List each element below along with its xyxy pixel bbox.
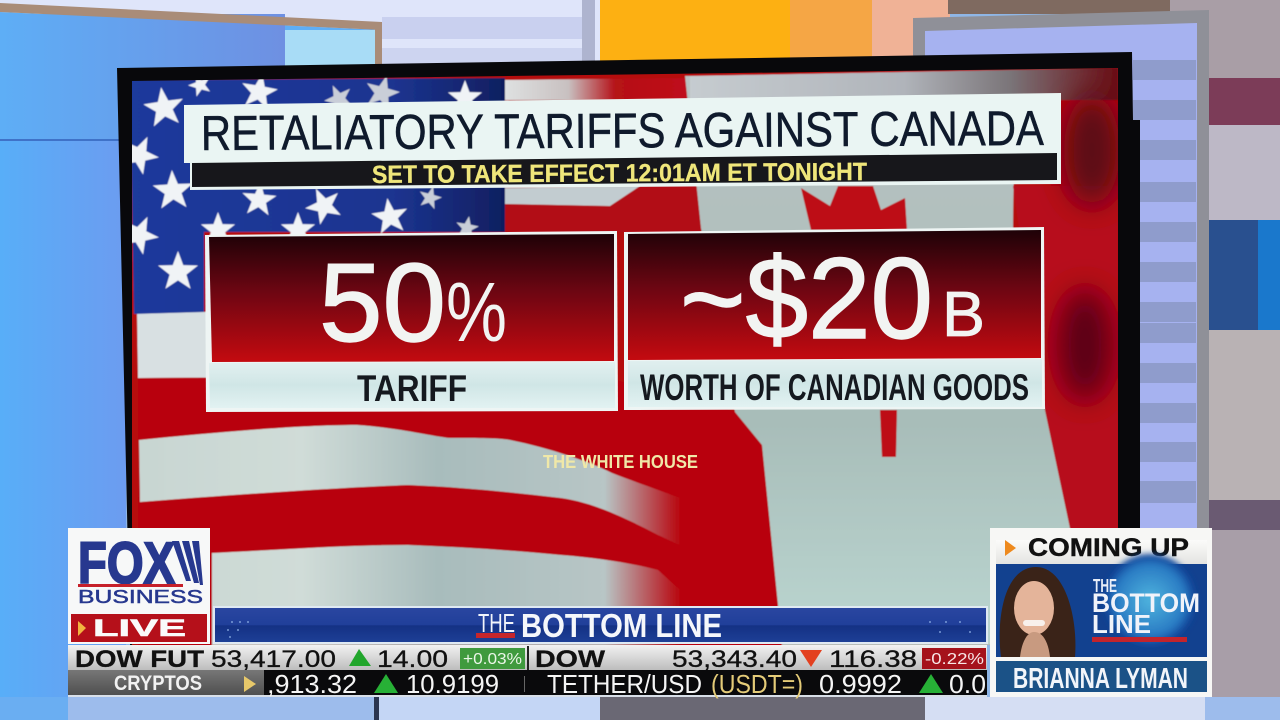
subtitle bar xyxy=(192,153,1057,189)
program title: the: THE xyxy=(478,608,515,638)
promo: bottom: BOTTOM xyxy=(1092,588,1200,618)
promo: line: LINE xyxy=(1092,609,1151,639)
coming up heading: COMING UP xyxy=(1028,534,1189,562)
logo wordmark: business: BUSINESS xyxy=(78,587,203,607)
title banner xyxy=(184,93,1061,190)
dow value: 53,343.40 xyxy=(672,646,797,673)
ticker: top row: +0.03% xyxy=(463,651,522,668)
fox business logo xyxy=(68,528,210,644)
logo wordmark: fox: FOX xyxy=(78,531,175,596)
logo searchlight marks xyxy=(172,541,203,585)
ticker: top row xyxy=(68,645,987,673)
ticker: bottom row: 0.0 xyxy=(949,669,986,699)
stat: billions suffix: B xyxy=(942,278,985,350)
live badge xyxy=(71,614,207,642)
dow fut value: 53,417.00 xyxy=(211,646,336,673)
ticker: top row: 14.00 xyxy=(377,646,448,673)
presenter name bar: BRIANNA LYMAN xyxy=(1013,663,1188,695)
cryptos label: CRYPTOS xyxy=(114,672,202,695)
label: tariff: TARIFF xyxy=(357,368,467,409)
us flag stripes xyxy=(137,78,782,645)
program title bar xyxy=(213,606,988,644)
ticker: bottom row xyxy=(68,669,987,699)
live badge: LIVE xyxy=(93,615,186,642)
subtitle text: SET TO TAKE EFFECT 12:01AM ET TONIGHT xyxy=(372,158,867,189)
program title: bottom line: BOTTOM LINE xyxy=(521,607,722,644)
canton xyxy=(115,70,505,314)
promo: the: THE xyxy=(1093,576,1117,596)
source caption: THE WHITE HOUSE xyxy=(543,452,698,472)
panel: 50% tariff xyxy=(205,231,618,412)
tether symbol: (USDT=) xyxy=(711,669,803,699)
dow fut label: DOW FUT xyxy=(75,646,204,673)
panel: $20B goods xyxy=(624,227,1045,410)
canadian flag xyxy=(685,68,1120,645)
ticker: bottom row: 10.9199 xyxy=(406,669,499,699)
label: worth of canadian goods: WORTH OF CANADIAN GOODS xyxy=(640,367,1029,408)
crypto values: ,913.32 xyxy=(267,669,357,699)
presenter portrait xyxy=(1000,567,1075,657)
ticker: top row: -0.22% xyxy=(925,651,984,668)
ticker: top row: 116.38 xyxy=(829,646,917,673)
tether label: TETHER/USD xyxy=(547,669,702,699)
tether value: 0.9992 xyxy=(819,669,902,699)
coming up panel xyxy=(990,528,1212,697)
tv screen bezel xyxy=(117,52,1140,645)
promo image xyxy=(996,554,1207,657)
stat: percent sign: % xyxy=(446,265,507,359)
stat: ~$20: ~$20 xyxy=(680,235,933,363)
title text: RETALIATORY TARIFFS AGAINST CANADA xyxy=(201,102,1044,161)
flag background xyxy=(115,66,1120,646)
dow label: DOW xyxy=(535,646,605,673)
stat: 50: 50 xyxy=(319,241,446,365)
